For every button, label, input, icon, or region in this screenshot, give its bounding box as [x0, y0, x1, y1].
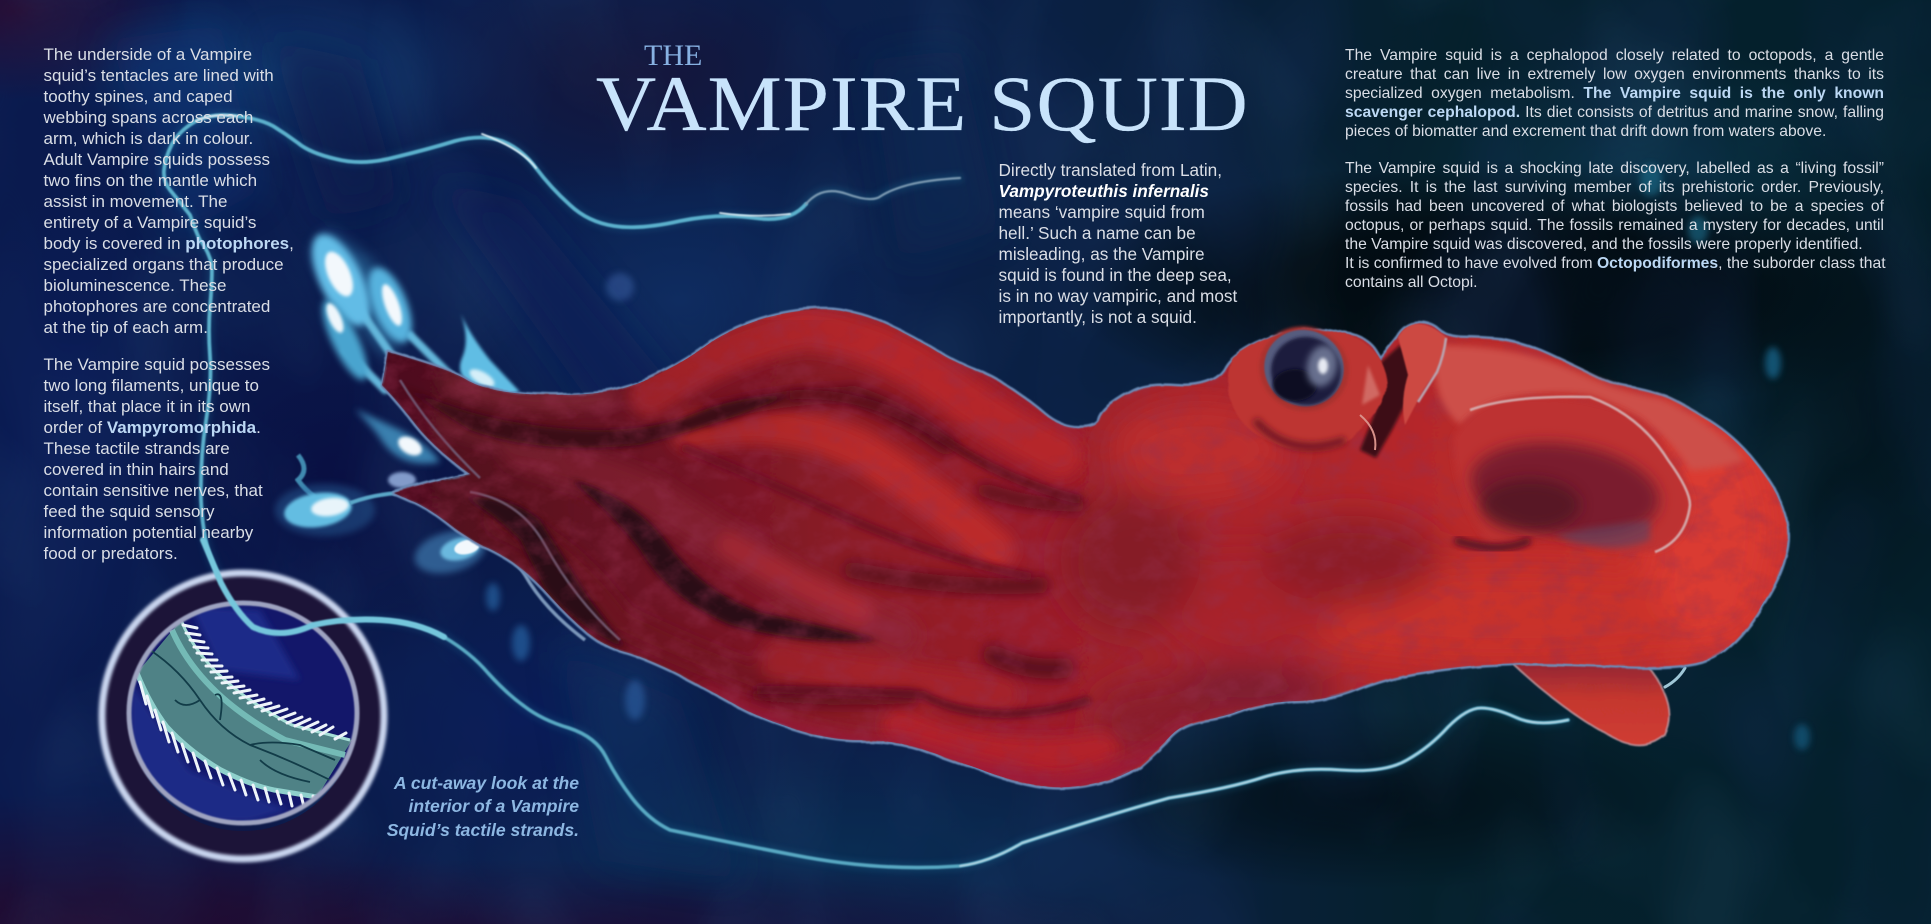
text block: tentacle anatomy: specialized organs that produce	[44, 255, 284, 274]
caption: cut-away inset: A cut-away look at the	[394, 773, 579, 793]
text block: name origin: importantly, is not a squid.	[998, 307, 1197, 327]
text block: tentacle anatomy: at the tip of each arm.	[44, 318, 208, 337]
text block: filaments: food or predators.	[44, 544, 178, 563]
photophore: lower middle tip	[355, 409, 440, 488]
text block: filaments: two long filaments, unique to	[44, 376, 259, 395]
tentacle crevices	[400, 385, 1090, 714]
text block: name origin: misleading, as the Vampire	[998, 244, 1205, 264]
photophores: glowing arm tips	[275, 226, 585, 640]
tentacle bands	[440, 328, 1100, 756]
text block: tentacle anatomy: bioluminescence. These	[44, 276, 227, 295]
title: VAMPIRE SQUID: VAMPIRE SQUID	[596, 60, 1249, 147]
text block: cephalopod overview: pieces of biomatter and excrement that drift down from waters above.	[1345, 123, 1826, 140]
eye socket	[1228, 330, 1387, 450]
text block: living fossil: It is confirmed to have evolved from Octopodiformes, the suborder class that	[1345, 255, 1886, 272]
text block: name origin: squid is found in the deep sea,	[998, 265, 1232, 285]
photophore: middle tip	[460, 314, 520, 395]
squid: lower funnel	[1513, 664, 1670, 745]
head top highlight	[1434, 345, 1745, 470]
text block: name origin: Directly translated from Latin,	[998, 160, 1222, 180]
text block: filaments: covered in thin hairs and	[44, 460, 229, 479]
tactile filament: lower strand	[253, 620, 1685, 868]
text block: living fossil: the Vampire squid was discovered, and the fossils were properly identified.	[1345, 236, 1863, 253]
text block: name origin	[998, 160, 1238, 327]
caption: cut-away inset: interior of a Vampire	[409, 796, 579, 816]
text block: cephalopod overview: creature that can live in extremely low oxygen environments thanks to its	[1345, 66, 1884, 83]
text block: tentacle anatomy: toothy spines, and caped	[44, 87, 233, 106]
text block: living fossil: fossils had been uncovered of what biologists believed to be a species of	[1345, 198, 1884, 215]
soft fold shadows	[710, 395, 1078, 699]
eye	[1247, 314, 1361, 424]
tactile filament: upper strand	[164, 115, 960, 627]
text block: name origin: is in no way vampiric, and most	[998, 286, 1237, 306]
text block: filaments: itself, that place it in its own	[44, 397, 250, 416]
text block: cephalopod overview: scavenger cephalopod. Its diet consists of detritus and marine snow, falling	[1345, 104, 1884, 121]
text block: filaments: These tactile strands are	[44, 439, 230, 458]
text block: name origin: hell.’ Such a name can be	[998, 223, 1196, 243]
left tentacle shade	[382, 320, 804, 690]
text block: tentacle anatomy: The underside of a Vampire	[44, 45, 252, 64]
text block: living fossil	[1345, 160, 1886, 291]
text block: filaments: The Vampire squid possesses	[44, 355, 270, 374]
inset outer ring	[115, 586, 371, 846]
text block: living fossil: The Vampire squid is a shocking late discovery, labelled as a “living fossil”	[1345, 160, 1884, 177]
text block: filaments: contain sensitive nerves, that	[44, 481, 263, 500]
text block: cephalopod overview: specialized oxygen metabolism. The Vampire squid is the only known	[1345, 85, 1884, 102]
caption: cut-away inset: Squid’s tactile strands.	[387, 820, 579, 840]
body silhouette	[382, 310, 1788, 787]
body rim light	[382, 310, 1788, 787]
strand crossing inset	[203, 540, 444, 637]
cut-away inset of tactile strand	[102, 540, 444, 859]
inset veins	[150, 650, 335, 782]
text block: tentacle anatomy: photophores are concentrated	[44, 297, 270, 316]
text block: tentacle anatomy	[44, 45, 294, 337]
text block: tentacle anatomy: webbing spans across each	[44, 108, 253, 127]
text block: cephalopod overview: The Vampire squid is a cephalopod closely related to octopods, a gentle	[1345, 47, 1884, 64]
text block: filaments	[44, 355, 270, 563]
text block: tentacle anatomy: Adult Vampire squids possess	[44, 150, 270, 169]
inset inner ring	[129, 603, 357, 823]
text block: filaments: feed the squid sensory	[44, 502, 215, 521]
photophore: low tip	[410, 524, 585, 640]
lower edge tint	[700, 690, 1190, 785]
text block: tentacle anatomy: assist in movement. The	[44, 192, 227, 211]
mantle fold near nose	[1453, 397, 1692, 552]
text block: name origin: means ‘vampire squid from	[998, 202, 1205, 222]
title: THE: THE	[644, 39, 702, 72]
text block: cephalopod overview	[1345, 47, 1884, 140]
text block: living fossil: octopus, or perhaps squid. The fossils remained a mystery for decades, until	[1345, 217, 1884, 234]
brow fold	[1360, 324, 1447, 458]
text block: filaments: order of Vampyromorphida.	[44, 418, 261, 437]
inset interior	[131, 604, 355, 821]
photophore: left large tip	[275, 455, 400, 536]
text block: filaments: information potential nearby	[44, 523, 253, 542]
body painted shading	[380, 300, 1800, 800]
caption: cut-away inset	[387, 773, 579, 840]
text block: name origin: Vampyroteuthis infernalis	[998, 181, 1209, 201]
photophore group: upper tips	[300, 226, 470, 395]
text block: tentacle anatomy: two fins on the mantle which	[44, 171, 257, 190]
text block: tentacle anatomy: arm, which is dark in colour.	[44, 129, 253, 148]
text block: tentacle anatomy: squid’s tentacles are lined with	[44, 66, 274, 85]
text block: tentacle anatomy: entirety of a Vampire squid’s	[44, 213, 256, 232]
text block: tentacle anatomy: body is covered in photophores,	[44, 234, 294, 253]
inset spines	[140, 625, 346, 808]
squid body	[380, 300, 1800, 800]
title	[596, 39, 1249, 147]
text block: living fossil: contains all Octopi.	[1345, 274, 1478, 291]
text block: living fossil: species. It is the last surviving member of its prehistoric order. Previously,	[1345, 179, 1884, 196]
